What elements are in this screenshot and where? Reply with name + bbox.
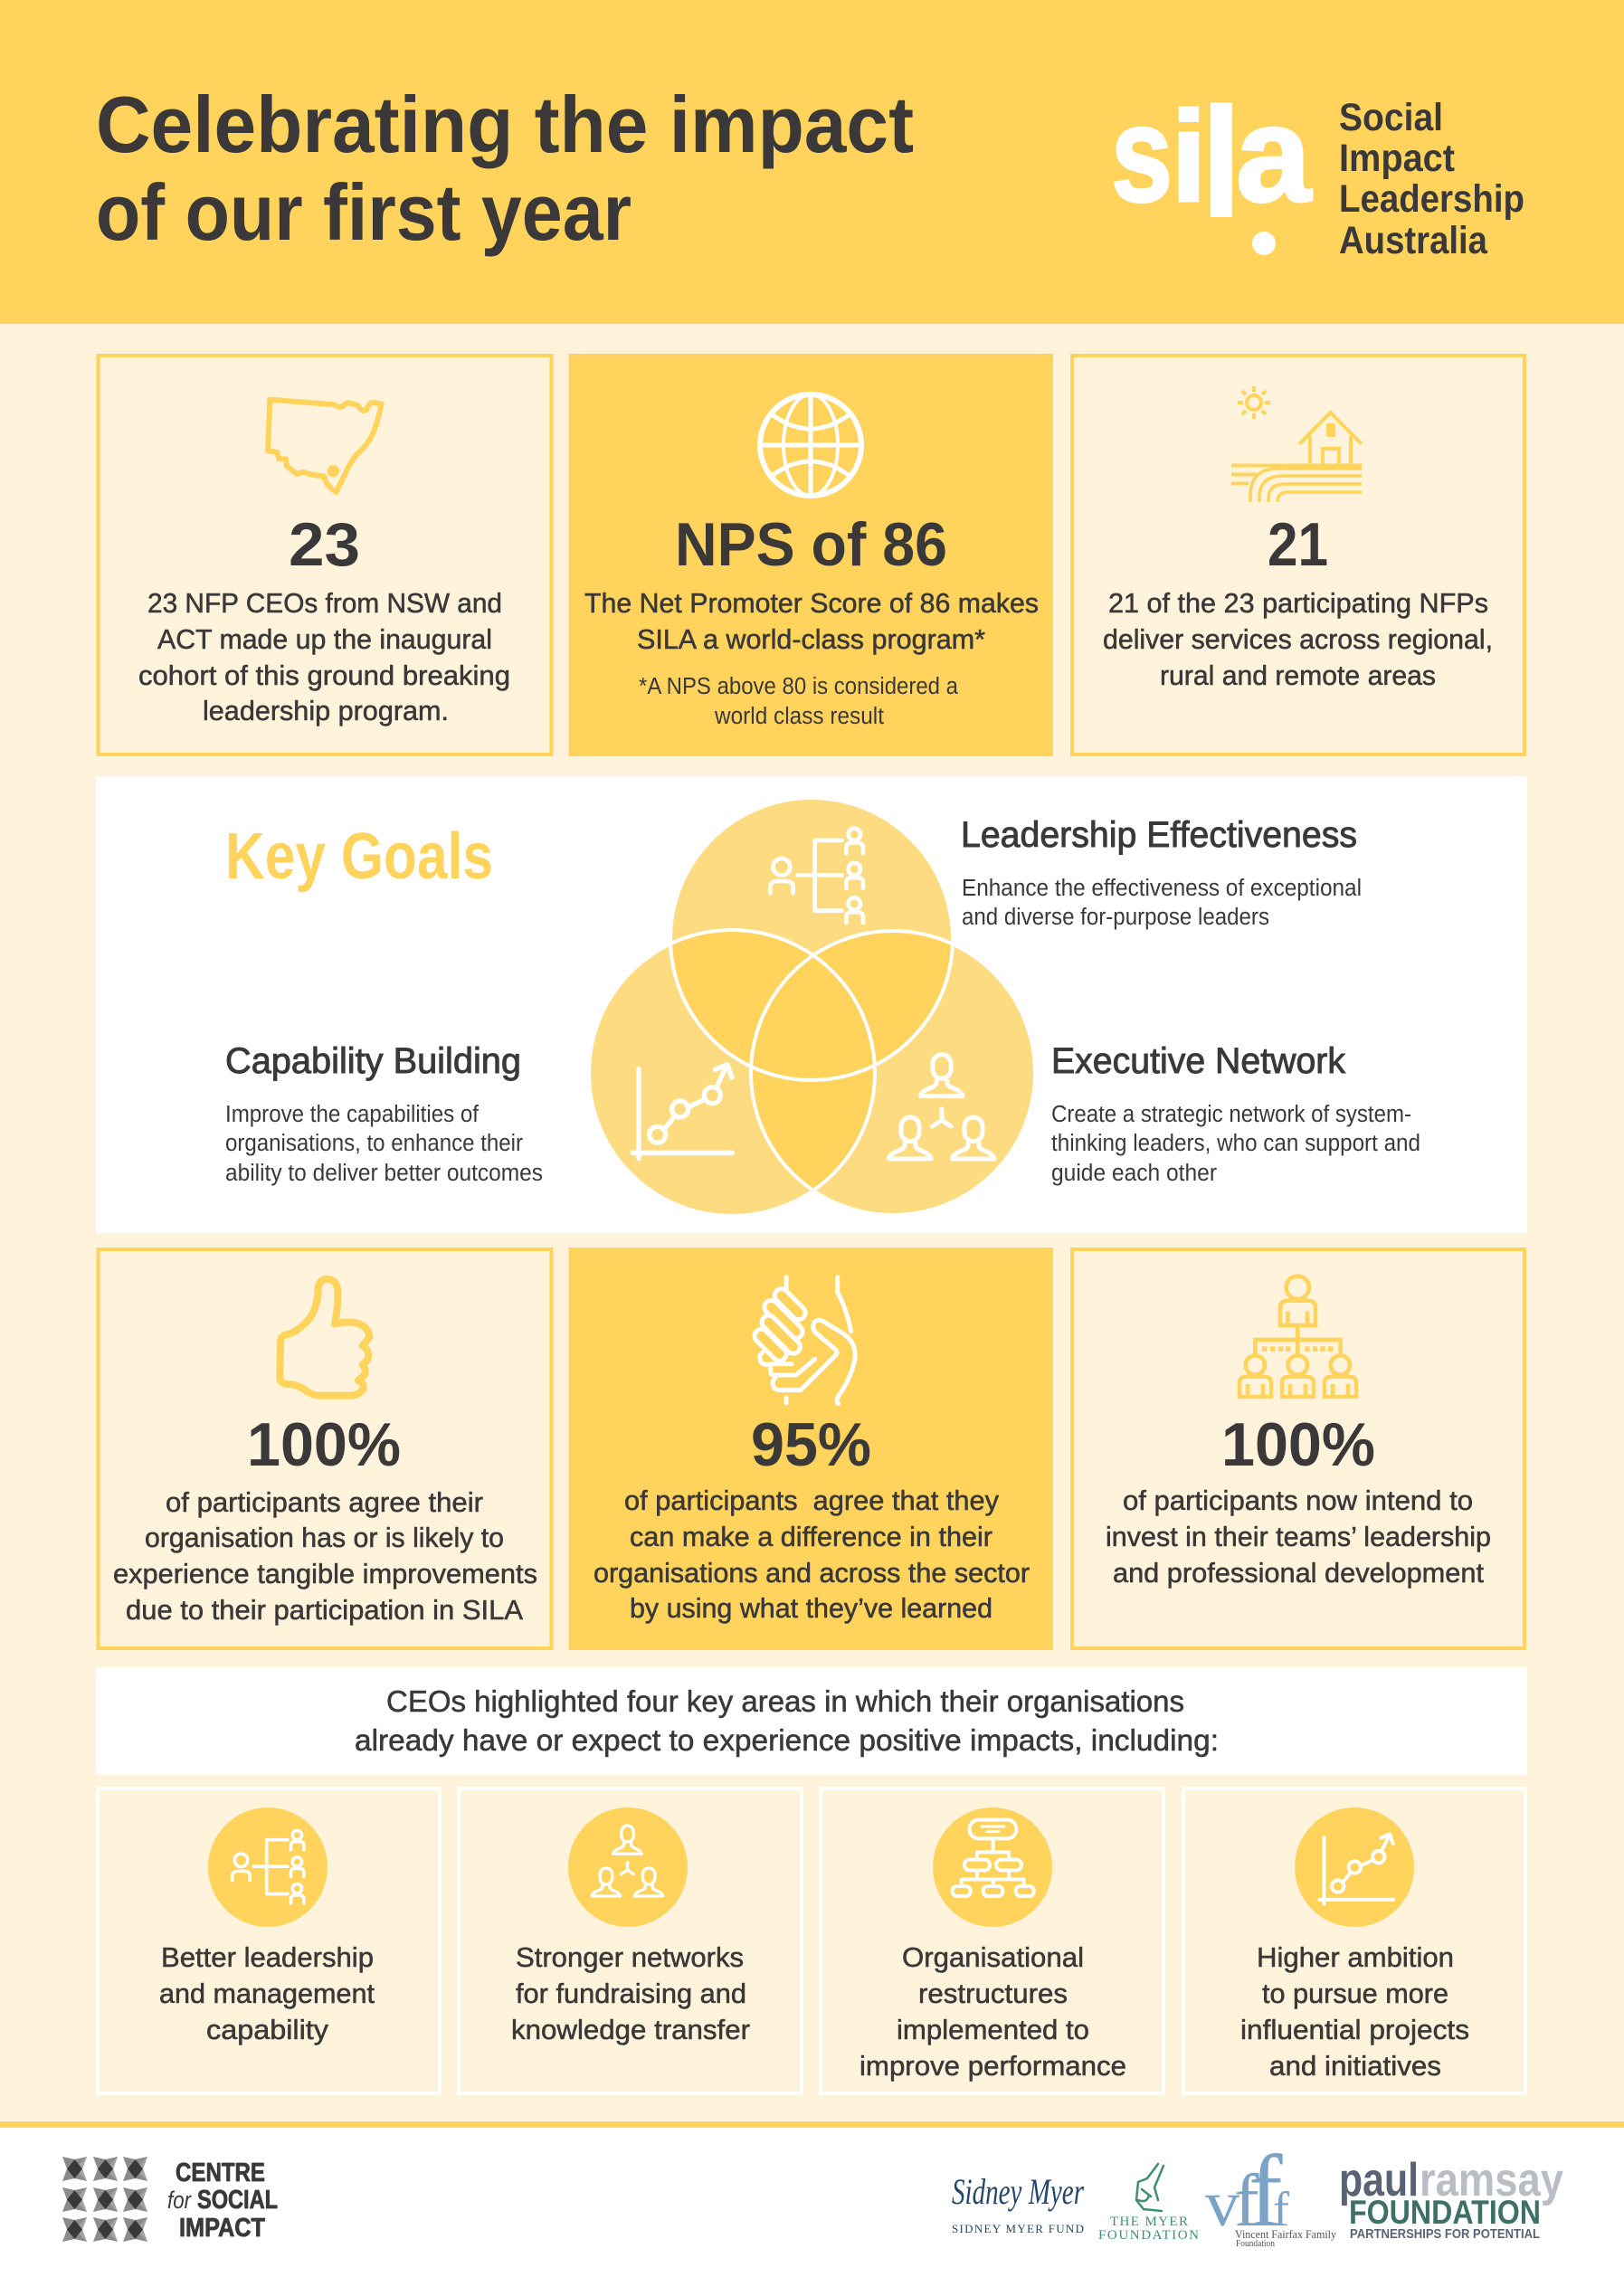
footnote: world class result [714,704,884,729]
panel: CEOs highlight heading: already have or expect to experience positive impacts, including: [355,1723,1219,1757]
text: invest description: invest in their teams’ leadership [1106,1521,1491,1552]
text: improvement description: due to their participation in SILA [126,1594,523,1626]
icon: globe [760,394,861,496]
logo: sila [1111,75,1313,255]
text: better leadership: and management [159,1978,375,2009]
statistic: 95%: 95% [751,1410,871,1479]
logo: Vincent Fairfax Family Foundation: f [1273,2182,1289,2236]
text: 23 description: 23 NFP CEOs from NSW and [147,587,502,619]
logo: Centre for Social Impact: IMPACT [179,2214,265,2243]
text: NPS description [584,587,1039,655]
panel: organisational restructures [821,1788,1163,2093]
text: 21 description [1103,587,1493,691]
logo: Paul Ramsay Foundation: ramsay [1420,2154,1563,2206]
icon: NSW map [268,400,382,492]
logo wordmark: Social Impact Leadership Australia: Leadership [1339,177,1524,221]
logo: sila: l [1200,75,1243,251]
logo wordmark: Social Impact Leadership Australia: Australia [1339,219,1488,262]
panel: CEOs highlight heading: CEOs highlighted four key areas in which their organisations [386,1684,1184,1718]
goal: Executive Network: Create a strategic network of system- [1051,1102,1411,1127]
icon: growth chart [632,1065,732,1159]
goal: Executive Network [1051,1041,1420,1186]
icon: growth badge [1295,1807,1414,1927]
logo: Sidney Myer Fund [952,2171,1084,2235]
goal: Capability Building: Capability Building [225,1041,521,1081]
text: higher ambition: Higher ambition [1257,1941,1454,1973]
logo: Centre for Social Impact: SOCIAL [197,2186,278,2215]
goal: Leadership Effectiveness: and diverse for-purpose leaders [962,905,1269,930]
statistic: 23: 23 [289,510,360,579]
text: improvement description [113,1486,537,1626]
text: higher ambition [1240,1941,1469,2082]
text: 21 description: 21 of the 23 participating NFPs [1108,587,1488,619]
panel: key goals [96,776,1527,1233]
text: stronger networks: knowledge transfer [511,2014,750,2045]
text: 21 description: deliver services across regional, [1103,623,1493,655]
icon: helping hands [752,1277,855,1404]
text: difference description: by using what they’ve learned [630,1592,992,1624]
logo: The Myer Foundation [1098,2164,1199,2243]
logo: Paul Ramsay Foundation: PARTNERSHIPS FOR POTENTIAL [1350,2226,1540,2242]
goal: Executive Network: thinking leaders, who can support and [1051,1131,1420,1156]
icon: org chart badge [933,1807,1052,1927]
text: invest description: and professional development [1113,1557,1484,1589]
logo: Centre for Social Impact [62,2157,278,2243]
text: difference description: of participants agree that they [624,1485,999,1516]
logo: Vincent Fairfax Family Foundation: f [1249,2135,1283,2248]
goal: Executive Network: Executive Network [1051,1041,1346,1081]
text: difference description: organisations and across the sector [594,1557,1030,1589]
logo: sila: s [1111,78,1173,230]
footnote: *A NPS above 80 is considered a [639,674,959,699]
logo: Sidney Myer Fund: Sidney Myer [952,2171,1084,2212]
logo: Vincent Fairfax Family Foundation: f [1234,2158,1259,2242]
venn diagram [589,798,1035,1216]
text: difference description: can make a difference in their [630,1521,992,1552]
logo: Vincent Fairfax Family Foundation [1205,2135,1336,2249]
text: 23 description: ACT made up the inaugural [157,623,492,655]
panel: higher ambition [1183,1788,1525,2093]
header band [0,0,1624,324]
text: 21 description: rural and remote areas [1160,659,1436,691]
text: NPS description: The Net Promoter Score of 86 makes [584,587,1039,619]
text: 23 description [138,587,510,726]
logo: The Myer Foundation: FOUNDATION [1098,2228,1199,2243]
panel: stronger networks [459,1788,802,2093]
statistic: 100%: 100% [247,1410,401,1479]
text: better leadership: capability [206,2014,329,2045]
logo: Sidney Myer Fund: SIDNEY MYER FUND [952,2222,1084,2235]
title: Celebrating the impact [96,80,914,169]
logo wordmark: Social Impact Leadership Australia: Social [1339,96,1443,139]
logo: Paul Ramsay Foundation: paul [1339,2154,1419,2206]
text: organisational restructures: implemented to [897,2014,1089,2045]
icon: network [889,1055,994,1159]
icon: leadership [770,829,863,923]
text: better leadership [159,1941,375,2045]
logo: Paul Ramsay Foundation [1339,2154,1563,2242]
text: improvement description: experience tangible improvements [113,1558,537,1589]
icon: network badge [568,1807,688,1927]
logo: Centre for Social Impact: for [167,2187,192,2214]
panel: 100% tangible improvements [98,1249,552,1648]
logo: Vincent Fairfax Family Foundation: Vincent Fairfax Family [1235,2227,1336,2241]
panel: 23 NFP CEOs [98,356,552,754]
text: invest description [1106,1485,1491,1589]
text: improvement description: of participants agree their [166,1486,483,1518]
panel: 95% make a difference [568,1248,1053,1650]
text: stronger networks [511,1941,750,2045]
icon: farm house and sun [1231,386,1362,502]
goal: Capability Building [225,1041,543,1186]
text: organisational restructures: Organisational [902,1941,1084,1973]
text: invest description: of participants now intend to [1123,1485,1473,1516]
goal: Capability Building: ability to deliver better outcomes [225,1161,543,1186]
text: better leadership: Better leadership [161,1941,374,1973]
text: NPS description: SILA a world-class program* [637,623,985,655]
panel: 100% invest in teams [1072,1249,1524,1648]
text: improvement description: organisation has or is likely to [145,1522,504,1553]
logo wordmark: Social Impact Leadership Australia: Impact [1339,137,1455,180]
goal: Capability Building: organisations, to enhance their [225,1131,523,1156]
panel: CEOs highlight heading [96,1667,1527,1775]
logo: sila: i [1171,85,1207,229]
logo wordmark: Social Impact Leadership Australia [1339,96,1524,262]
text: higher ambition: influential projects [1240,2014,1469,2045]
icon: leadership badge [208,1807,328,1927]
text: higher ambition: to pursue more [1262,1978,1448,2009]
icon: thumbs up [280,1279,369,1396]
logo: Paul Ramsay Foundation: FOUNDATION [1349,2194,1541,2231]
text: organisational restructures [859,1941,1126,2082]
statistic: 100%: 100% [1221,1410,1375,1479]
panel: 21 regional NFPs [1072,356,1524,754]
logo: Vincent Fairfax Family Foundation: Foundation [1236,2239,1275,2249]
panel: NPS of 86 [568,354,1053,756]
title [96,80,914,257]
logo: Centre for Social Impact: CENTRE [176,2158,265,2187]
text: stronger networks: Stronger networks [516,1941,744,1973]
footnote [639,674,959,729]
title: of our first year [96,167,632,257]
text: organisational restructures: improve performance [859,2050,1126,2082]
goal: Leadership Effectiveness: Leadership Effectiveness [961,815,1357,855]
text: organisational restructures: restructures [918,1978,1068,2009]
text: higher ambition: and initiatives [1269,2050,1441,2082]
panel: better leadership [98,1788,440,2093]
text: stronger networks: for fundraising and [516,1978,746,2009]
text: difference description [594,1485,1030,1624]
logo: The Myer Foundation: THE MYER [1110,2215,1188,2229]
text: 23 description: leadership program. [203,695,449,726]
icon: organisation of people [1239,1276,1356,1397]
goal: Leadership Effectiveness: Enhance the effectiveness of exceptional [962,876,1362,901]
logo: sila: a [1236,78,1313,230]
goal: Executive Network: guide each other [1051,1161,1217,1186]
footer [0,2121,1624,2296]
heading: Key Goals: Key Goals [225,821,493,893]
statistic: NPS of 86: NPS of 86 [675,510,947,579]
goal: Capability Building: Improve the capabilities of [225,1102,480,1127]
text: 23 description: cohort of this ground breaking [138,659,510,691]
goal: Leadership Effectiveness [961,815,1362,930]
logo: Vincent Fairfax Family Foundation: v [1205,2168,1239,2240]
statistic: 21: 21 [1268,510,1328,579]
